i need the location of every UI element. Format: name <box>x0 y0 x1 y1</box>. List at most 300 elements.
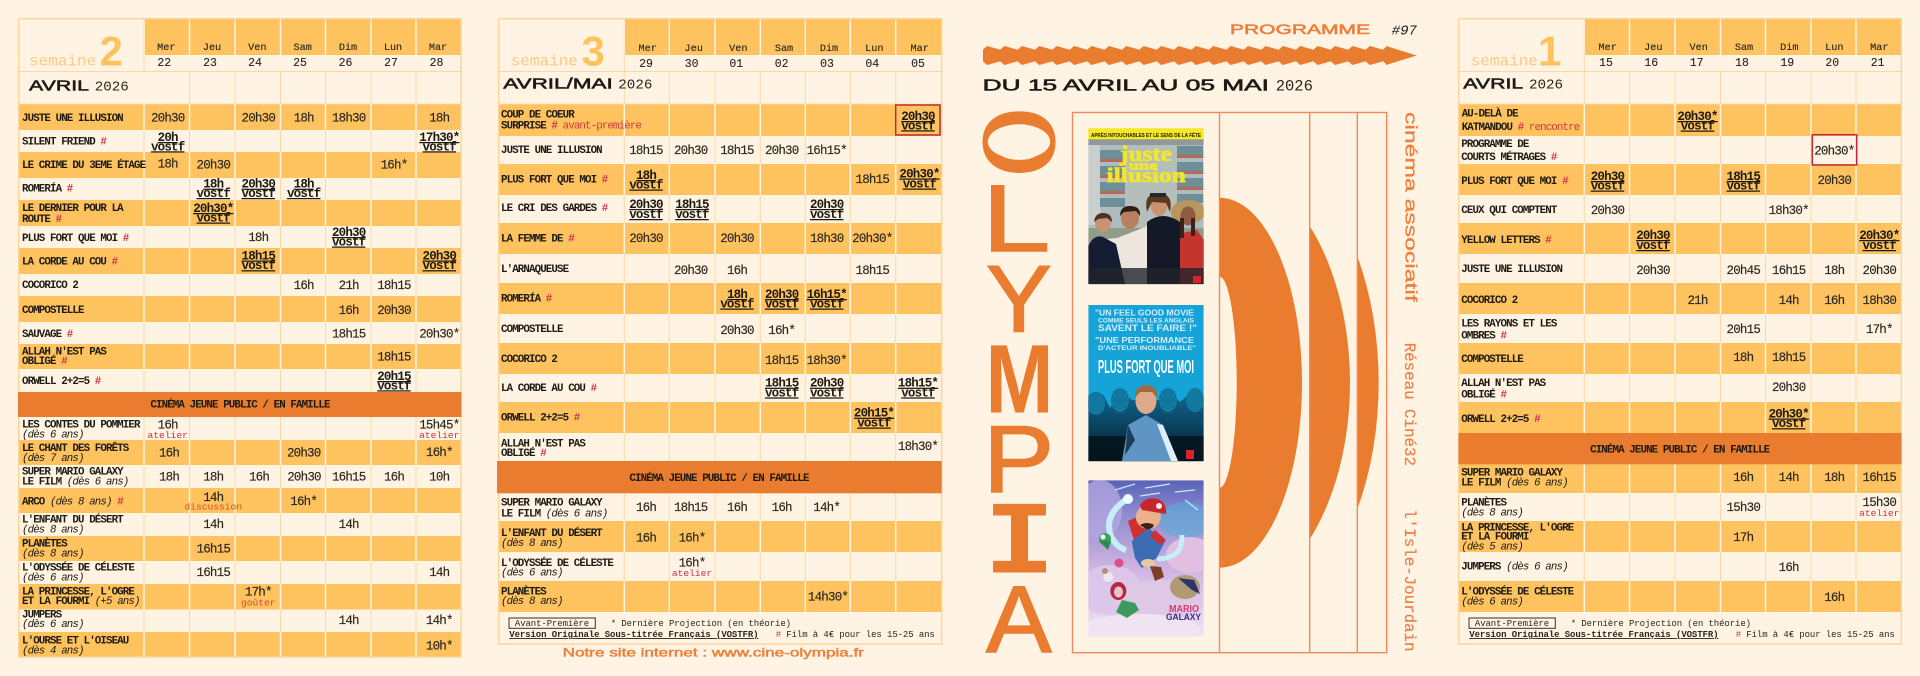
row: Les contes du pommier: 15h45* <box>419 419 459 433</box>
row: Yellow letters: 20h30 <box>1636 229 1670 243</box>
row: Allah n'est pas obligé <box>1461 378 1806 401</box>
table grid week 3 <box>498 18 942 644</box>
day headers: Dim <box>820 43 838 55</box>
row: Super Mario Galaxy: 16h <box>772 501 792 515</box>
row: Compostelle: 20h30 <box>720 324 754 338</box>
row: Plus fort que moi: PLUS FORT QUE MOI # <box>22 233 130 245</box>
row: Yellow letters: vostf <box>1863 239 1896 253</box>
row: Romería: 18h <box>203 178 224 192</box>
heading: semaine 3 <box>511 28 605 75</box>
row: Juste une illusion: JUSTE UNE ILLUSION <box>22 113 123 125</box>
day headers: 28 <box>430 57 443 70</box>
row: La princesse, l'ogre et la fourmi: 17h* <box>245 585 272 599</box>
row: La corde au cou <box>501 377 938 400</box>
row: Jumpers: 16h <box>1779 561 1799 575</box>
row: La corde au cou: LA CORDE AU COU # <box>501 383 598 395</box>
row: Jumpers <box>22 610 453 631</box>
row: Romería: vostf <box>720 298 754 312</box>
row: Planètes: 14h30* <box>808 591 848 605</box>
row: La corde au cou: vostf <box>810 386 844 400</box>
row: Les contes du pommier: LES CONTES DU POMMIER <box>22 420 141 432</box>
poster: Juste une illusion: une <box>1129 157 1157 172</box>
day headers: Ven <box>248 43 266 54</box>
day headers: Dim <box>339 42 357 54</box>
row: Ceux qui comptent: CEUX QUI COMPTENT <box>1461 205 1558 217</box>
month heading: 2026 <box>95 80 129 96</box>
highlight frame <box>896 105 940 135</box>
row: La princesse, l'ogre et la fourmi <box>1461 523 1754 553</box>
poster: Plus fort que moi: "UNE PERFORMANCE <box>1095 336 1195 345</box>
row: Planètes: atelier <box>1859 508 1899 519</box>
row: L'odyssée de Céleste: 16h <box>1824 591 1845 605</box>
row: Juste une illusion: 16h15* <box>807 144 847 158</box>
row: Romería: 18h <box>294 178 314 192</box>
band: cinéma jeune public <box>18 392 462 417</box>
heading: semaine 3: 3 <box>582 28 605 75</box>
row: Planètes: 15h30 <box>1863 496 1896 510</box>
dates heading <box>983 78 1313 96</box>
row: Super Mario Galaxy: 18h <box>203 471 224 485</box>
row: Planètes <box>22 537 230 561</box>
poster: Plus fort que moi <box>1087 305 1204 462</box>
title: OLYMPIA vertical letters: I <box>984 487 1055 605</box>
row: Silent Friend: 20h <box>158 131 178 145</box>
title: OLYMPIA vertical letters <box>961 108 1076 673</box>
row: L'enfant du désert: 14h <box>339 518 359 532</box>
row: Le chant des forêts: 16h <box>159 447 179 461</box>
day headers <box>1599 42 1888 70</box>
day headers: 04 <box>865 58 879 71</box>
day headers: Mar <box>429 43 447 54</box>
arrow <box>983 46 1417 65</box>
row: Planètes: (dès 8 ans) <box>1461 507 1523 519</box>
day headers: Mer <box>639 44 657 55</box>
row: La princesse, l'ogre et la fourmi: ET LA FOURMI (+5 ans) <box>22 596 140 608</box>
row: Plus fort que moi: PLUS FORT QUE MOI # <box>501 174 609 186</box>
row: Plus fort que moi <box>22 226 366 250</box>
row: L'odyssée de Céleste <box>22 560 450 584</box>
row: Orwell 2+2=5: ORWELL 2+2=5 # <box>501 413 581 425</box>
month heading <box>503 76 652 94</box>
row: La corde au cou: vostf <box>242 259 275 273</box>
row: L'odyssée de Céleste: L'ODYSSÉE DE CÉLESTE <box>501 556 614 570</box>
row: Cocorico 2 <box>1461 294 1896 308</box>
day headers: 23 <box>203 57 217 70</box>
day headers: Lun <box>384 43 402 54</box>
day headers: 16 <box>1644 57 1658 70</box>
row: L'arnaqueuse: 18h15 <box>856 264 889 278</box>
band: cinéma jeune public: CINÉMA JEUNE PUBLIC / EN FAMILLE <box>629 471 810 485</box>
row: La corde au cou: LA CORDE AU COU # <box>22 256 119 268</box>
row: Plus fort que moi: vostf <box>332 236 366 250</box>
row: Super Mario Galaxy: SUPER MARIO GALAXY <box>501 497 603 509</box>
row: La princesse, l'ogre et la fourmi: 17h <box>1733 531 1754 545</box>
row: Au-delà de Katmandou <box>1462 107 1718 134</box>
heading: semaine 1: semaine <box>1471 53 1538 71</box>
row: Juste une illusion: JUSTE UNE ILLUSION <box>501 145 602 157</box>
legend <box>509 618 935 640</box>
row: Super Mario Galaxy: SUPER MARIO GALAXY <box>22 466 124 478</box>
heading: semaine 3: semaine <box>511 53 578 71</box>
row: L'odyssée de Céleste: (dès 6 ans) <box>501 568 563 580</box>
row: Arco: 16h* <box>290 495 317 509</box>
row: Silent Friend: 17h30* <box>419 131 460 145</box>
row: Coup de coeur surprise: vostf <box>901 119 935 133</box>
row: Plus fort que moi: vostf <box>1591 180 1625 194</box>
band: cinéma jeune public: CINÉMA JEUNE PUBLIC / EN FAMILLE <box>150 398 331 412</box>
row: Les contes du pommier: 16h <box>158 419 178 433</box>
row: L'odyssée de Céleste: (dès 6 ans) <box>1461 597 1523 609</box>
table grid week 1 <box>1458 18 1902 644</box>
row: L'enfant du désert: 14h <box>203 518 224 532</box>
row: Compostelle: 18h <box>1733 351 1754 365</box>
row: Romería: vostf <box>242 187 275 201</box>
row: Super Mario Galaxy: 16h <box>249 471 269 485</box>
row: Planètes: PLANÈTES <box>1461 495 1507 509</box>
row: La corde au cou: 18h15 <box>765 377 799 391</box>
row: Super Mario Galaxy: 14h <box>1779 471 1799 485</box>
row: Le crime du 3eme étage: 16h* <box>381 158 407 172</box>
row: Plus fort que moi <box>501 168 940 192</box>
row: Les rayons et les ombres: 17h* <box>1866 323 1893 337</box>
row: Cocorico 2: 16h <box>294 279 314 293</box>
legend: * Dernière Projection (en théorie) <box>611 619 791 629</box>
legend: Version Originale Sous-titrée Français (VOSTFR) <box>1469 630 1718 640</box>
row: Planètes: 15h30 <box>1727 501 1760 515</box>
row: Super Mario Galaxy: 16h15 <box>1863 471 1896 485</box>
day headers: Lun <box>865 44 883 55</box>
row: Planètes: PLANÈTES <box>22 537 68 551</box>
row: Coup de coeur surprise: COUP DE COEUR <box>501 109 575 121</box>
row: L'ourse et l'oiseau: L'OURSE ET L'OISEAU <box>22 635 129 647</box>
row: Au-delà de Katmandou: KATMANDOU # rencontre <box>1462 122 1579 134</box>
row: Super Mario Galaxy <box>22 466 450 488</box>
panel: central cover <box>961 22 1420 673</box>
row: Les contes du pommier <box>22 419 459 442</box>
poster: Plus fort que moi: SAVENT LE FAIRE !" <box>1098 323 1197 333</box>
day headers: 30 <box>685 58 699 71</box>
day headers: 18 <box>1735 57 1749 70</box>
row: Juste une illusion: 20h30 <box>1636 264 1670 278</box>
row: Plus fort que moi: vostf <box>1727 180 1760 194</box>
day headers: 20 <box>1825 57 1839 70</box>
row: La femme de: LA FEMME DE # <box>501 234 575 246</box>
day headers: 22 <box>157 57 171 70</box>
row: Juste une illusion: 18h <box>294 112 314 126</box>
heading: semaine 2: 2 <box>100 28 123 75</box>
row: Orwell 2+2=5: 20h15* <box>854 407 894 421</box>
row: Programme de courts métrages: COURTS MÉTRAGES # <box>1461 152 1557 164</box>
row: Orwell 2+2=5: vostf <box>377 379 411 393</box>
row: Orwell 2+2=5: 20h15 <box>377 370 411 384</box>
day headers: 05 <box>911 58 925 71</box>
row: Le dernier pour la route: ROUTE # <box>22 214 61 226</box>
row: Le chant des forêts <box>22 441 453 465</box>
month heading: 2026 <box>1529 78 1563 94</box>
row: Planètes <box>1461 495 1899 519</box>
legend: Avant-Première <box>515 619 589 629</box>
row: Arco: ARCO (dès 8 ans) # <box>22 496 124 508</box>
row: Le cri des gardes: 20h30 <box>629 198 663 212</box>
row: Plus fort que moi: 18h15 <box>1727 170 1760 184</box>
row: Super Mario Galaxy: 20h30 <box>287 471 321 485</box>
row: L'enfant du désert: 16h <box>636 532 656 546</box>
row: Juste une illusion: 18h <box>1824 264 1845 278</box>
highlight frame <box>1812 135 1857 165</box>
row: Plus fort que moi: 20h30* <box>899 168 940 182</box>
row: Romería: ROMERÍA # <box>22 182 74 196</box>
month heading: 2026 <box>618 78 652 94</box>
poster: Plus fort que moi: COMME SEULS LES ANGLAIS <box>1098 318 1195 324</box>
poster: Plus fort que moi: D'ACTEUR INOUBLIABLE" <box>1098 345 1196 352</box>
row: Romería: 18h <box>727 288 747 302</box>
legend: # Film à 4€ pour les 15-25 ans <box>1736 630 1895 640</box>
row: Sauvage: SAUVAGE # <box>22 329 74 341</box>
row: Cocorico 2: 21h <box>1687 294 1708 308</box>
month heading: AVRIL/MAI <box>503 76 613 93</box>
title: OLYMPIA vertical letters: Y <box>986 247 1052 353</box>
day headers: Sam <box>775 44 793 55</box>
table grid week 2 <box>18 18 461 657</box>
row: Au-delà de Katmandou: 20h30* <box>1677 110 1718 124</box>
legend: Version Originale Sous-titrée Français (VOSTFR) <box>509 630 758 640</box>
row: Cocorico 2: COCORICO 2 <box>22 280 78 292</box>
title: OLYMPIA vertical letters: A <box>986 567 1052 673</box>
day headers <box>157 42 447 70</box>
row: Coup de coeur surprise: 20h30 <box>901 110 935 124</box>
row: Ceux qui comptent <box>1461 204 1809 218</box>
row: Sauvage: 20h30* <box>419 328 459 342</box>
row: Plus fort que moi: 20h30 <box>1818 174 1851 188</box>
row: L'enfant du désert: L'ENFANT DU DÉSERT <box>501 526 603 540</box>
row: Le chant des forêts: (dès 7 ans) <box>22 453 84 465</box>
row: Le crime du 3eme étage: 18h <box>158 158 178 172</box>
row: Super Mario Galaxy: 16h <box>727 501 747 515</box>
row: L'enfant du désert: L'ENFANT DU DÉSERT <box>22 512 124 526</box>
poster: Juste une illusion: illusion <box>1107 163 1186 187</box>
row: Juste une illusion: 20h30 <box>765 144 799 158</box>
row: Le cri des gardes <box>501 198 844 222</box>
row: Silent Friend: SILENT FRIEND # <box>22 137 107 149</box>
row: Le cri des gardes: 18h15 <box>675 198 709 212</box>
row: Plus fort que moi: 18h <box>636 169 656 183</box>
title: OLYMPIA vertical letters: L <box>982 166 1050 272</box>
row: Allah n'est pas obligé <box>22 346 411 368</box>
row: Plus fort que moi <box>1461 170 1851 194</box>
row: Yellow letters <box>1461 229 1900 253</box>
row: Compostelle <box>501 324 795 338</box>
month heading: AVRIL <box>1463 76 1523 93</box>
row: Super Mario Galaxy: LE FILM (dès 6 ans) <box>1461 477 1568 489</box>
heading: semaine 2 <box>29 28 123 75</box>
row: Compostelle: COMPOSTELLE <box>1461 354 1524 366</box>
day headers: 25 <box>293 57 307 70</box>
row: Le crime du 3eme étage <box>22 158 407 172</box>
row: Super Mario Galaxy: 14h* <box>813 501 840 515</box>
month heading <box>29 78 129 96</box>
row: Juste une illusion <box>1461 264 1896 278</box>
row: La princesse, l'ogre et la fourmi: goûter <box>241 597 276 608</box>
row: Romería: vostf <box>287 187 321 201</box>
month heading: AVRIL <box>29 78 89 95</box>
row: Yellow letters: vostf <box>1636 239 1670 253</box>
row: Juste une illusion <box>22 112 450 126</box>
row: Arco: 14h <box>203 491 224 505</box>
panel: semaine 2 schedule <box>18 18 462 657</box>
day headers: Mar <box>911 44 929 55</box>
row: L'ourse et l'oiseau: (dès 4 ans) <box>22 645 84 657</box>
row: Cocorico 2: 18h30* <box>807 354 847 368</box>
row: Super Mario Galaxy: LE FILM (dès 6 ans) <box>501 509 607 521</box>
row: L'odyssée de Céleste: L'ODYSSÉE DE CÉLESTE <box>22 560 135 574</box>
poster: Juste une illusion: APRÈS INTOUCHABLES ET LE SENS DE LA FÊTE <box>1091 131 1201 139</box>
row: La princesse, l'ogre et la fourmi <box>22 585 276 608</box>
row: Juste une illusion <box>501 144 847 158</box>
day headers: 29 <box>639 58 653 71</box>
row: La femme de: 20h30 <box>720 232 754 246</box>
row: La corde au cou: 20h30 <box>423 250 456 264</box>
row: La corde au cou: vostf <box>765 386 799 400</box>
row: Super Mario Galaxy: 16h <box>636 501 656 515</box>
row: Orwell 2+2=5: vostf <box>857 416 891 430</box>
dates heading: DU 15 AVRIL AU 05 MAI <box>983 78 1269 95</box>
day headers: Jeu <box>685 44 703 55</box>
row: Les rayons et les ombres: OMBRES # <box>1461 330 1506 342</box>
row: Allah n'est pas obligé: 18h15 <box>377 350 411 364</box>
band: cinéma jeune public <box>1458 433 1902 464</box>
row: Plus fort que moi: 20h30 <box>1591 170 1625 184</box>
row: Le crime du 3eme étage: LE CRIME DU 3EME ÉTAGE <box>22 158 147 172</box>
day headers: 01 <box>729 58 743 71</box>
row: Compostelle: COMPOSTELLE <box>22 305 85 317</box>
poster: Super Mario Galaxy <box>1088 480 1204 637</box>
row: Juste une illusion: 16h15 <box>1772 264 1806 278</box>
heading: semaine 2: semaine <box>29 53 96 71</box>
row: Les contes du pommier: (dès 6 ans) <box>22 430 84 442</box>
row: Super Mario Galaxy <box>1461 468 1896 489</box>
row: Sauvage <box>22 328 459 342</box>
row: Juste une illusion: 18h15 <box>629 144 663 158</box>
title: OLYMPIA vertical letters: O <box>961 108 1076 177</box>
row: Le dernier pour la route: LE DERNIER POUR LA <box>22 203 124 215</box>
row: Super Mario Galaxy: SUPER MARIO GALAXY <box>1461 468 1563 480</box>
row: Le chant des forêts: 16h* <box>426 446 453 460</box>
day headers: Dim <box>1780 42 1798 54</box>
row: Juste une illusion: JUSTE UNE ILLUSION <box>1461 264 1562 276</box>
row: Romería: 20h30 <box>242 178 275 192</box>
row: Programme de courts métrages: PROGRAMME DE <box>1461 139 1530 151</box>
row: Le dernier pour la route: vostf <box>197 212 230 226</box>
row: Allah n'est pas obligé: 20h30 <box>1772 381 1806 395</box>
frame with columns <box>1072 112 1387 653</box>
row: L'arnaqueuse: L'ARNAQUEUSE <box>501 264 570 276</box>
row: Super Mario Galaxy: 18h <box>1824 471 1845 485</box>
row: Planètes: (dès 8 ans) <box>22 549 84 561</box>
day headers: 21 <box>1871 57 1885 70</box>
row: Plus fort que moi: 18h <box>248 231 269 245</box>
row: La corde au cou: vostf <box>901 386 935 400</box>
row: Planètes: 16h15 <box>197 543 230 557</box>
legend <box>1469 618 1895 640</box>
row: Cocorico 2: 21h <box>339 279 359 293</box>
day headers: Sam <box>1735 43 1753 54</box>
legend: # Film à 4€ pour les 15-25 ans <box>776 630 935 640</box>
row: L'odyssée de Céleste: atelier <box>672 568 712 579</box>
row: Super Mario Galaxy <box>501 497 840 521</box>
row: Allah n'est pas obligé <box>501 439 938 460</box>
row: Allah n'est pas obligé: OBLIGÉ # <box>22 356 67 368</box>
row: L'odyssée de Céleste: L'ODYSSÉE DE CÉLESTE <box>1461 585 1575 599</box>
day headers <box>639 43 929 71</box>
row: Arco: discussion <box>185 502 242 512</box>
row: Orwell 2+2=5 <box>22 370 411 393</box>
row: Planètes: PLANÈTES <box>501 584 547 598</box>
row: Le cri des gardes: 20h30 <box>810 198 844 212</box>
row: La femme de: 20h30 <box>629 232 663 246</box>
row: Le cri des gardes: vostf <box>629 208 663 222</box>
row: Compostelle: 18h15 <box>1772 351 1806 365</box>
row: Cocorico 2: 14h <box>1779 294 1799 308</box>
row: Silent Friend <box>22 131 460 154</box>
row: Les rayons et les ombres <box>1461 319 1893 342</box>
row: Ceux qui comptent: 18h30* <box>1769 204 1809 218</box>
row: Romería: vostf <box>810 298 844 312</box>
row: Plus fort que moi: vostf <box>629 178 663 192</box>
row: L'enfant du désert <box>501 526 705 550</box>
row: La princesse, l'ogre et la fourmi: ET LA FOURMI <box>1461 532 1529 544</box>
row: Programme de courts métrages <box>1461 135 1857 165</box>
row: Le cri des gardes: vostf <box>810 208 844 222</box>
row: Super Mario Galaxy: LE FILM (dès 6 ans) <box>22 476 128 488</box>
row: Plus fort que moi: 18h15 <box>856 173 889 187</box>
row: Planètes: (dès 8 ans) <box>501 596 563 608</box>
day headers: Ven <box>729 44 747 55</box>
day headers: 19 <box>1780 57 1794 70</box>
row: Orwell 2+2=5: vostf <box>1772 417 1806 431</box>
row: L'odyssée de Céleste: 14h <box>429 566 450 580</box>
legend: * Dernière Projection (en théorie) <box>1571 619 1751 629</box>
row: La femme de: 18h30 <box>810 232 844 246</box>
row: Jumpers: (dès 6 ans) <box>22 619 84 631</box>
row: Planètes <box>501 584 848 608</box>
row: Romería: ROMERÍA # <box>501 292 553 306</box>
day headers: 26 <box>339 57 352 70</box>
row: Romería: 20h30 <box>765 288 799 302</box>
row: Orwell 2+2=5: ORWELL 2+2=5 # <box>1461 414 1541 426</box>
poster: Super Mario Galaxy: MARIO <box>1169 604 1199 615</box>
row: Juste une illusion: 20h30 <box>1863 264 1896 278</box>
row: L'ourse et l'oiseau: 10h* <box>426 639 453 653</box>
row: Coup de coeur surprise: SURPRISE # avant-première <box>501 120 641 132</box>
row: Compostelle: COMPOSTELLE <box>501 324 564 336</box>
row: La corde au cou: 18h15* <box>898 377 938 391</box>
heading: semaine 1: 1 <box>1538 28 1561 75</box>
row: Orwell 2+2=5: ORWELL 2+2=5 # <box>22 376 102 388</box>
row: Yellow letters: YELLOW LETTERS # <box>1461 235 1552 247</box>
panel: semaine 3 schedule <box>497 18 942 644</box>
row: Cocorico 2: 18h15 <box>765 354 799 368</box>
row: La princesse, l'ogre et la fourmi: (dès 5 ans) <box>1461 541 1523 553</box>
row: Super Mario Galaxy: 16h <box>1733 471 1754 485</box>
row: L'enfant du désert <box>22 512 359 536</box>
day headers: Jeu <box>203 43 221 54</box>
day headers: Mer <box>157 43 175 54</box>
row: L'odyssée de Céleste: (dès 6 ans) <box>22 572 84 584</box>
day headers: Mer <box>1599 43 1617 54</box>
row: Le crime du 3eme étage: 20h30 <box>197 158 230 172</box>
band: cinéma jeune public: CINÉMA JEUNE PUBLIC / EN FAMILLE <box>1590 443 1771 457</box>
graphic: crescent shapes <box>1220 198 1379 568</box>
